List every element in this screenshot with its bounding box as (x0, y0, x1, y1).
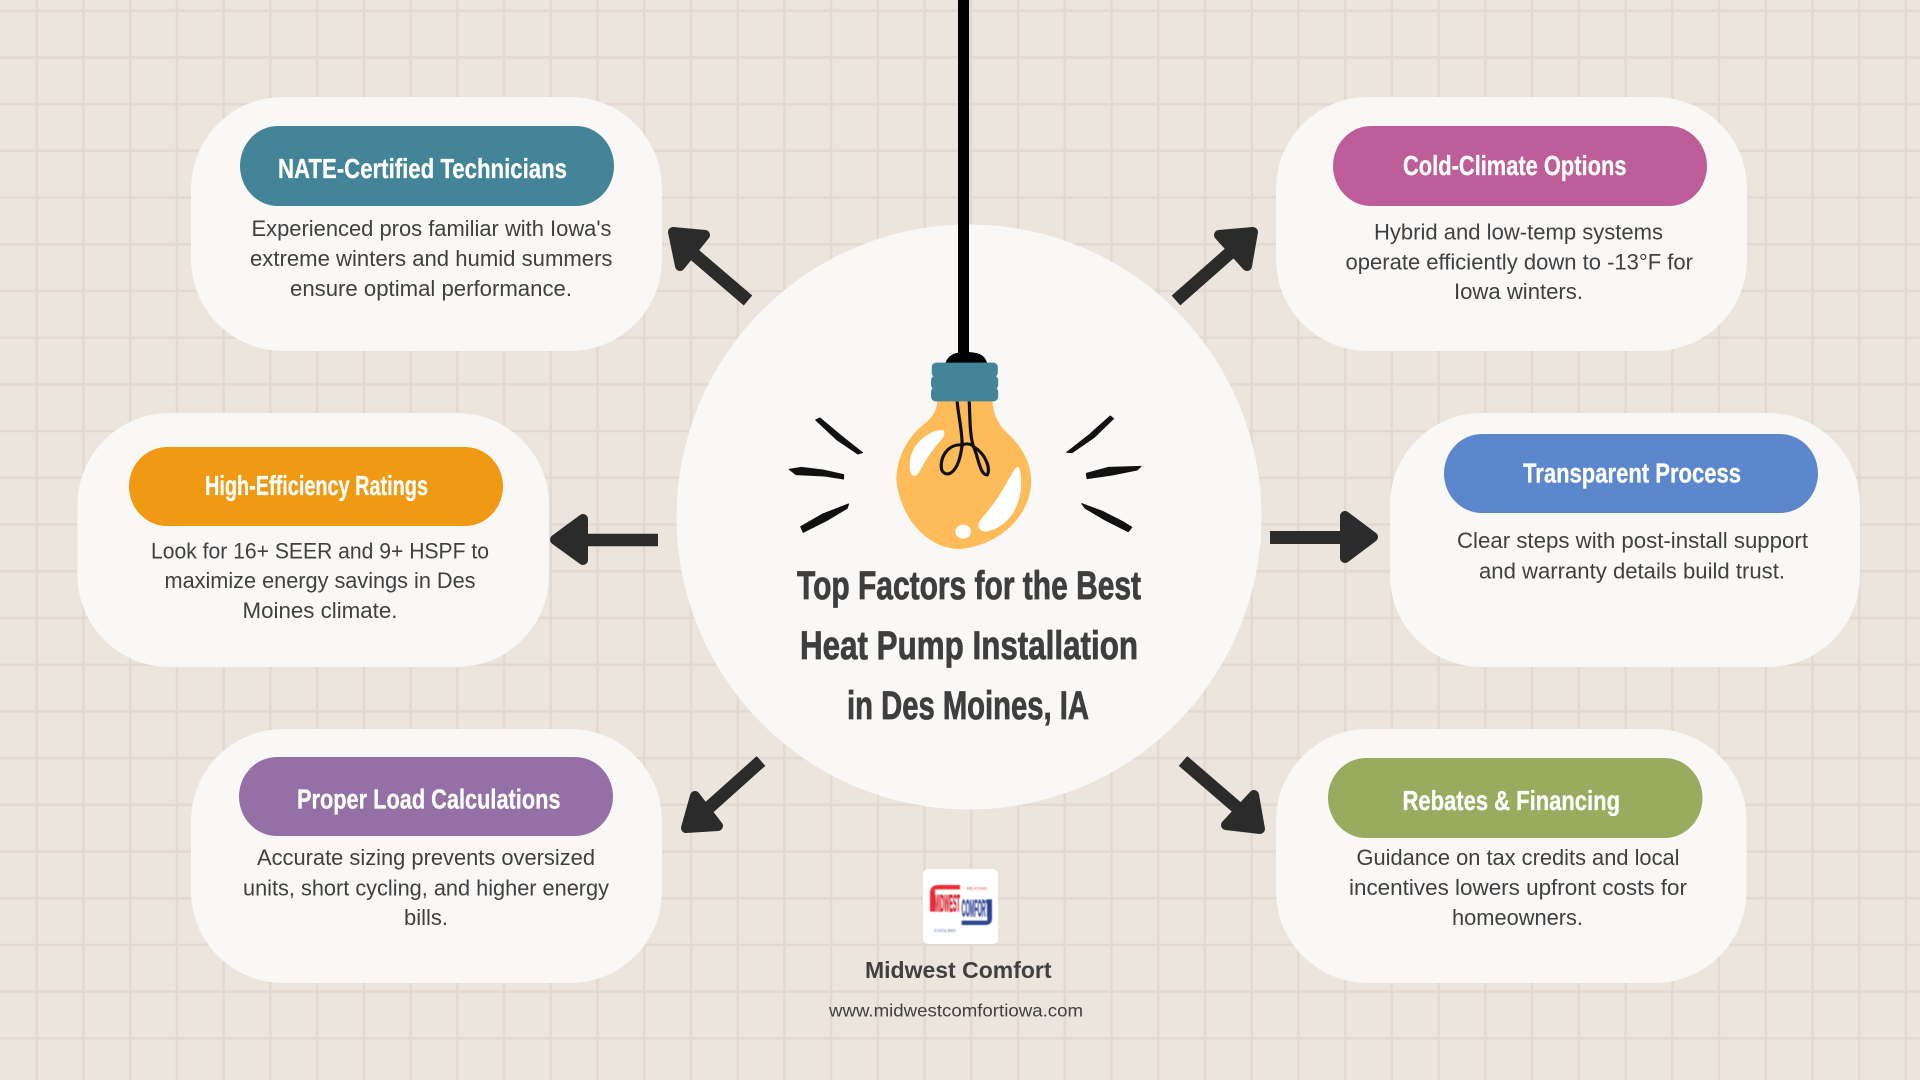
heading pill: NATE-Certified Technicians (240, 126, 614, 206)
text: Rebates description (1349, 845, 1687, 930)
cord (958, 0, 969, 362)
heading pill: Transparent Process: Transparent Process (1523, 458, 1741, 488)
arrow: to Proper Load card (686, 761, 761, 828)
text: High-Efficiency description (151, 538, 489, 623)
heading pill: High-Efficiency Ratings: High-Efficiency Ratings (205, 470, 428, 501)
heading pill: Rebates & Financing (1328, 758, 1702, 838)
text: Cold-Climate description: operate efficiently down to -13°F for (1346, 250, 1693, 274)
logo: Midwest Comfort: MIDWEST (934, 891, 960, 918)
logo: Midwest Comfort: HEATING (967, 886, 988, 891)
text: High-Efficiency description: Look for 16+ SEER and 9+ HSPF to (151, 538, 489, 564)
text: Rebates description: Guidance on tax credits and local (1356, 845, 1680, 870)
bulb highlights (910, 430, 1021, 539)
brand name: Midwest Comfort (865, 957, 1052, 983)
text: Transparent description: and warranty details build trust. (1479, 558, 1785, 584)
text: Rebates description: homeowners. (1452, 905, 1583, 930)
text: High-Efficiency description: maximize energy savings in Des (164, 568, 476, 593)
heading pill: Cold-Climate Options: Cold-Climate Options (1403, 150, 1626, 181)
arrow: to Rebates card (1183, 761, 1260, 829)
title (797, 564, 1141, 728)
website url: www.midwestcomfortiowa.com (828, 1000, 1083, 1020)
title: in Des Moines, IA (847, 684, 1089, 728)
text: Proper Load description: Accurate sizing prevents oversized (257, 845, 595, 870)
text: Cold-Climate description: Hybrid and low-temp systems (1374, 220, 1663, 244)
panel: Cold-Climate Options (1276, 97, 1747, 351)
socket cap (945, 352, 987, 363)
light rays (789, 416, 1141, 532)
text: Cold-Climate description (1346, 220, 1693, 304)
text: Proper Load description (243, 845, 610, 930)
title: Top Factors for the Best (797, 564, 1141, 608)
bulb glass (896, 398, 1031, 549)
heading pill: Cold-Climate Options (1333, 126, 1707, 206)
logo: Midwest Comfort: COOLING (934, 928, 956, 933)
heading pill: Proper Load Calculations: Proper Load Calculations (297, 784, 560, 814)
text: Cold-Climate description: Iowa winters. (1454, 279, 1583, 304)
arrow: to High-Efficiency card (555, 519, 658, 560)
heading pill: Rebates & Financing: Rebates & Financing (1402, 785, 1620, 816)
panel: Rebates & Financing (1276, 729, 1746, 983)
panel: Transparent Process (1390, 413, 1860, 667)
panel: NATE-Certified Technicians (191, 97, 662, 351)
heading pill: NATE-Certified Technicians: NATE-Certified Technicians (278, 153, 567, 184)
text: Transparent description: Clear steps with post-install support (1457, 528, 1809, 553)
text: NATE description (250, 216, 612, 301)
text: NATE description: Experienced pros familiar with Iowa's (252, 216, 612, 241)
text: COMFORT (962, 896, 989, 923)
arrow: to Cold-Climate card (1176, 232, 1253, 300)
heading pill: Proper Load Calculations (239, 757, 613, 836)
logo: Midwest Comfort (923, 869, 998, 944)
arrow: to NATE card (673, 232, 748, 300)
title: Heat Pump Installation (800, 624, 1138, 668)
panel: High-Efficiency Ratings (78, 413, 549, 667)
text: High-Efficiency description: Moines climate. (242, 598, 398, 623)
text: Proper Load description: units, short cycling, and higher energy (243, 876, 610, 900)
text: Transparent description (1457, 528, 1809, 584)
heading pill: High-Efficiency Ratings (129, 447, 503, 526)
socket (931, 363, 998, 401)
text: NATE description: extreme winters and humid summers (250, 246, 612, 271)
text: Proper Load description: bills. (404, 905, 448, 930)
heading pill: Transparent Process (1444, 434, 1818, 513)
text: NATE description: ensure optimal performance. (290, 276, 572, 301)
arrow: to Transparent card (1270, 516, 1373, 558)
panel: Proper Load Calculations (191, 729, 662, 983)
text: Rebates description: incentives lowers upfront costs for (1349, 875, 1687, 900)
filament (941, 401, 988, 475)
panel: central circle (676, 224, 1262, 810)
icon: light bulb (789, 352, 1141, 549)
